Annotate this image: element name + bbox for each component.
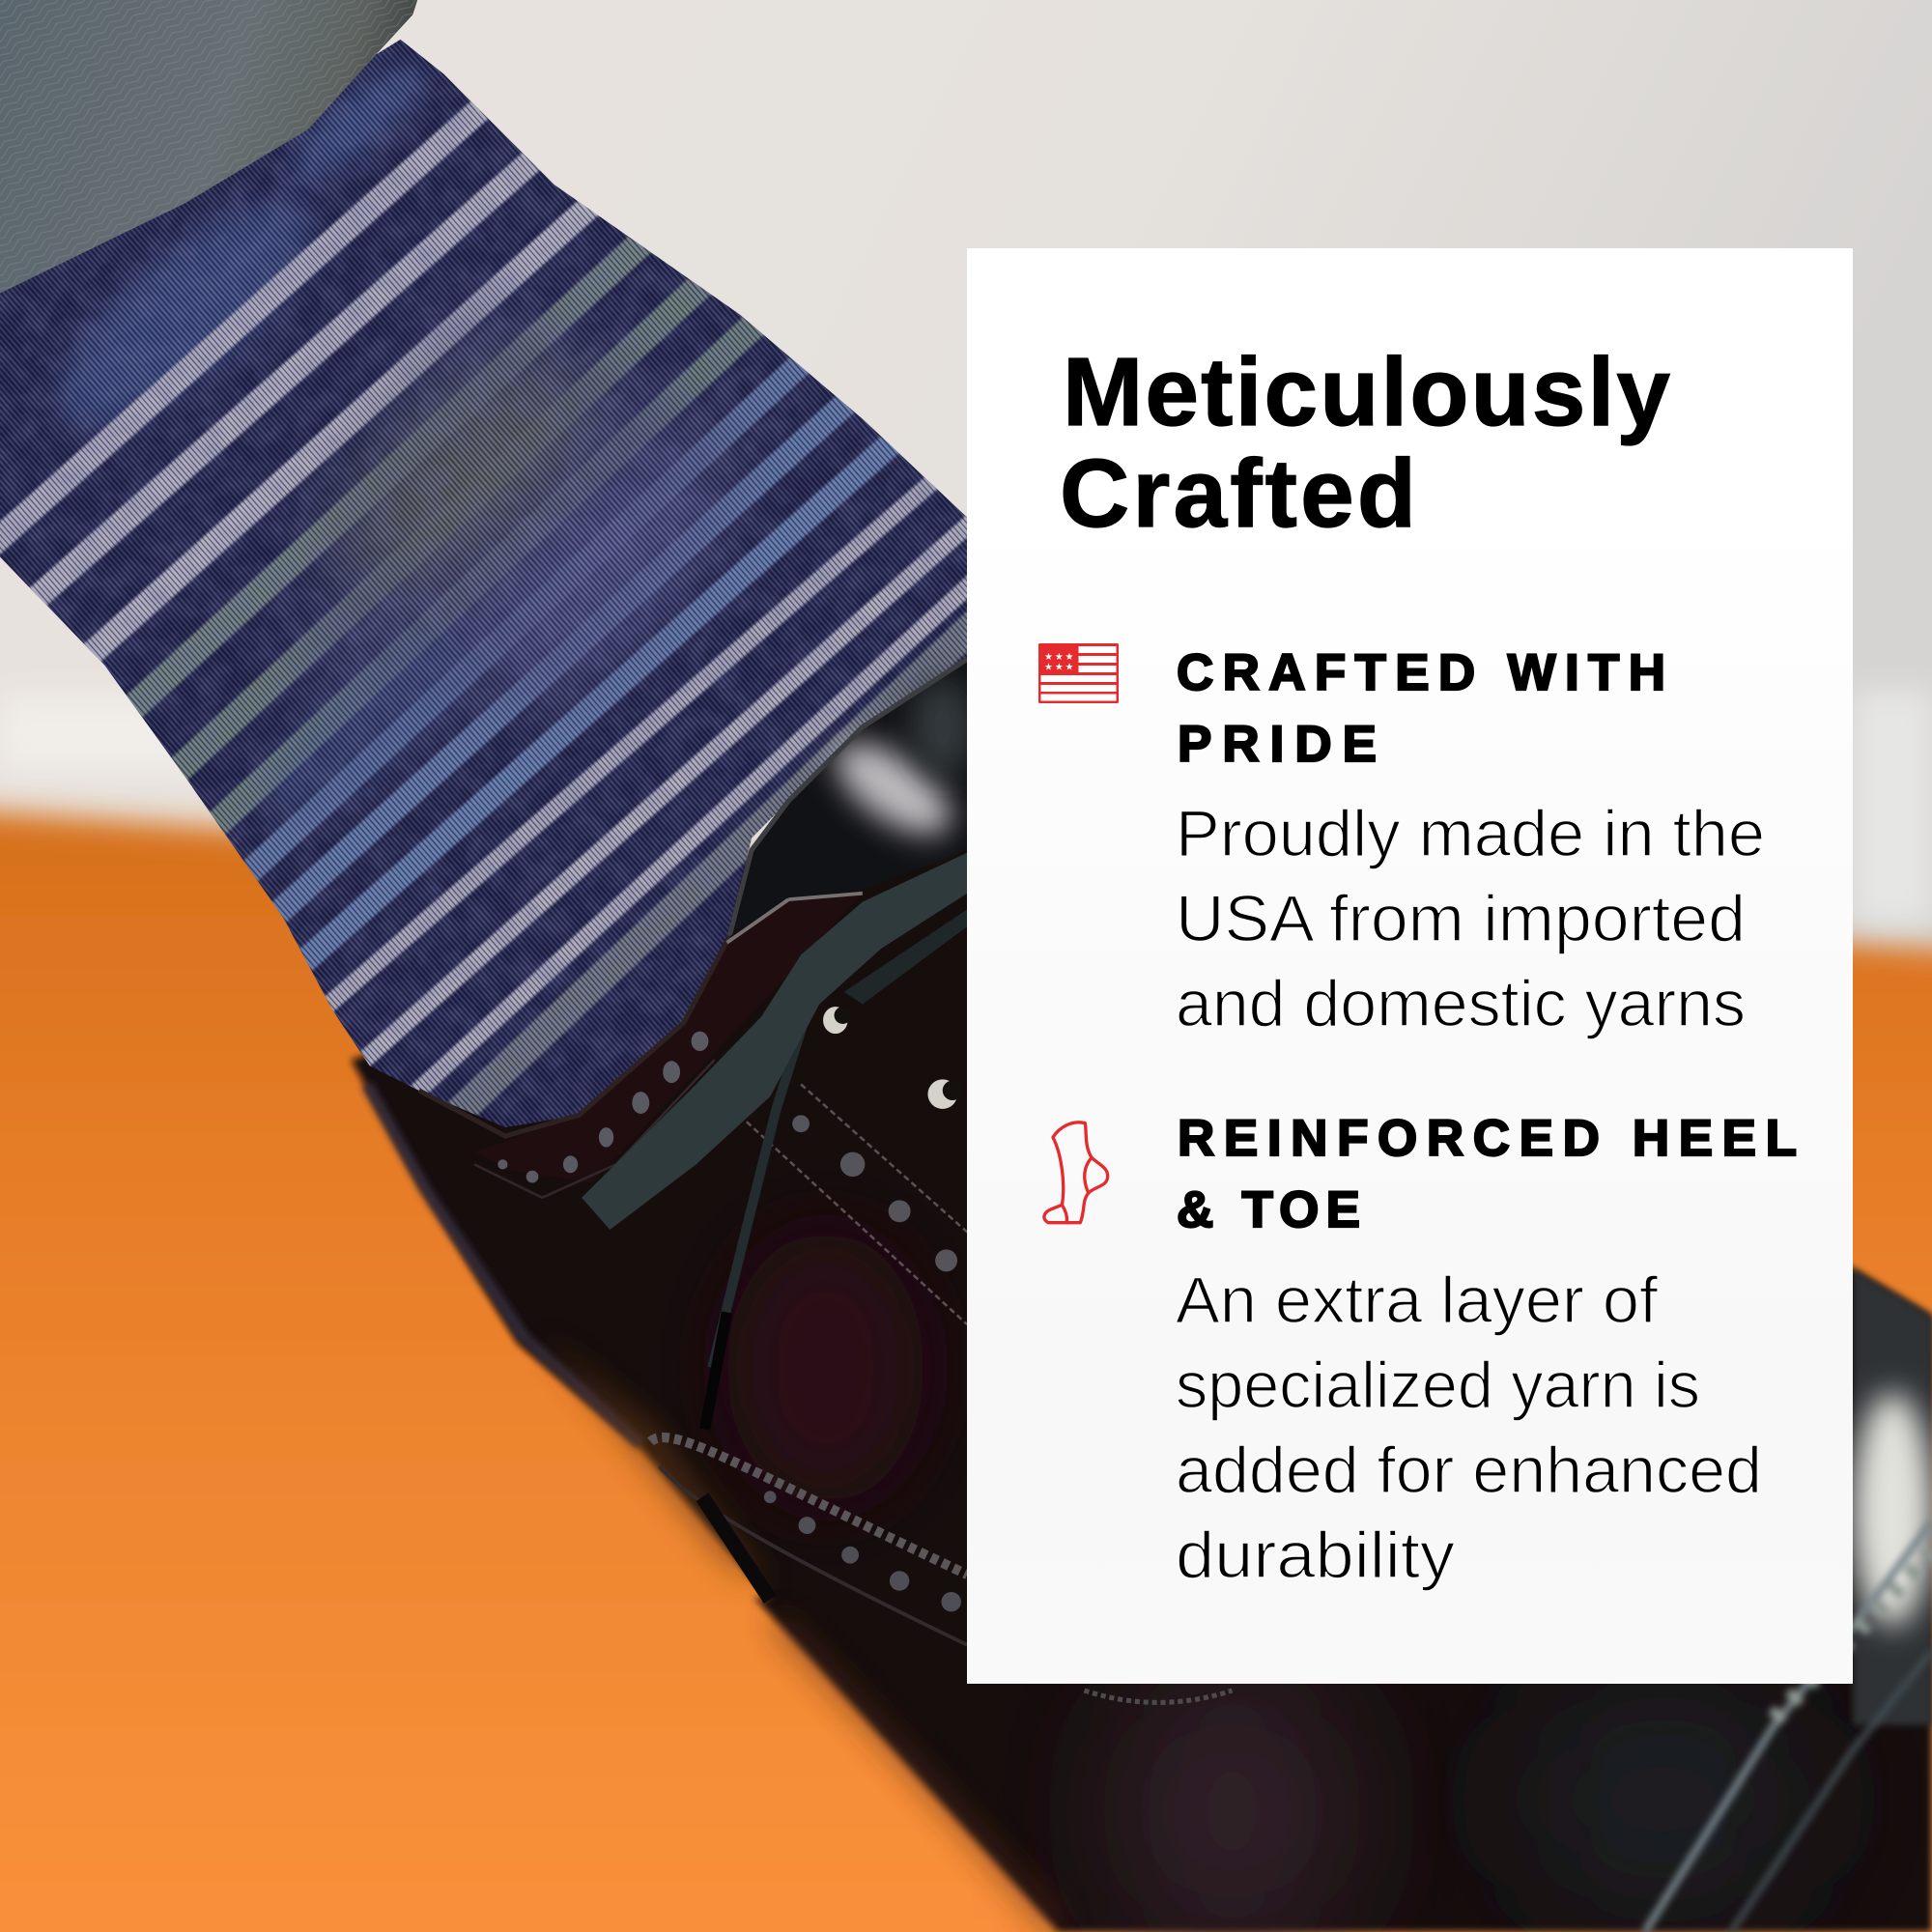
heading: crafted with pride: PRIDE (1178, 716, 1377, 773)
text block: crafted with pride: and domestic yarns (1176, 967, 1746, 1040)
text block: reinforced heel and toe: added for enhanced (1176, 1434, 1762, 1507)
shoe facing with leather highlight (729, 659, 975, 936)
eyelet band (419, 894, 863, 1198)
icon: american flag: ★ (1065, 663, 1074, 672)
heading: reinforced heel and toe: & TOE (1177, 1181, 1360, 1238)
lower brogue curve (650, 1437, 967, 1645)
icon: american flag: ★ (1055, 652, 1064, 663)
shoe body (352, 640, 1932, 1932)
title: Crafted (1060, 440, 1416, 548)
icon: american flag: ★ (1065, 652, 1074, 663)
trouser cuff (0, 0, 421, 296)
mottled centre of sock (237, 290, 752, 851)
orange table (0, 807, 1932, 1932)
icon: american flag (1038, 643, 1119, 703)
text block: reinforced heel and toe (1176, 1264, 1762, 1592)
text block: crafted with pride: USA from imported (1176, 882, 1746, 955)
sock stripes (0, 100, 967, 1116)
heading: reinforced heel and toe: REINFORCED HEEL (1178, 1110, 1797, 1167)
wall (0, 0, 1932, 985)
title: Meticulously (1063, 338, 1670, 446)
text block: reinforced heel and toe: specialized yarn is (1176, 1349, 1700, 1422)
icon: american flag: ★ (1044, 652, 1053, 663)
icon: sock outline (1044, 1122, 1108, 1223)
white text panel (967, 248, 1853, 1684)
shoelaces (582, 853, 967, 1430)
icon: american flag: ★ (1044, 663, 1053, 672)
heading: reinforced heel and toe (1177, 1110, 1797, 1238)
text block: reinforced heel and toe: durability (1176, 1519, 1455, 1592)
heading: crafted with pride (1177, 644, 1665, 773)
text block: reinforced heel and toe: An extra layer of (1176, 1264, 1658, 1337)
text block: crafted with pride (1176, 797, 1765, 1040)
sock (0, 40, 967, 1127)
upper shoe brogue with perforations (739, 1007, 967, 1324)
title (1060, 338, 1670, 548)
heading: crafted with pride: CRAFTED WITH (1177, 644, 1665, 701)
icon: american flag: ★ (1055, 663, 1064, 672)
toe brogue stitching (1645, 1521, 1932, 1932)
text block: crafted with pride: Proudly made in the (1176, 797, 1765, 870)
bottom stitching under panel (1084, 1690, 1233, 1702)
